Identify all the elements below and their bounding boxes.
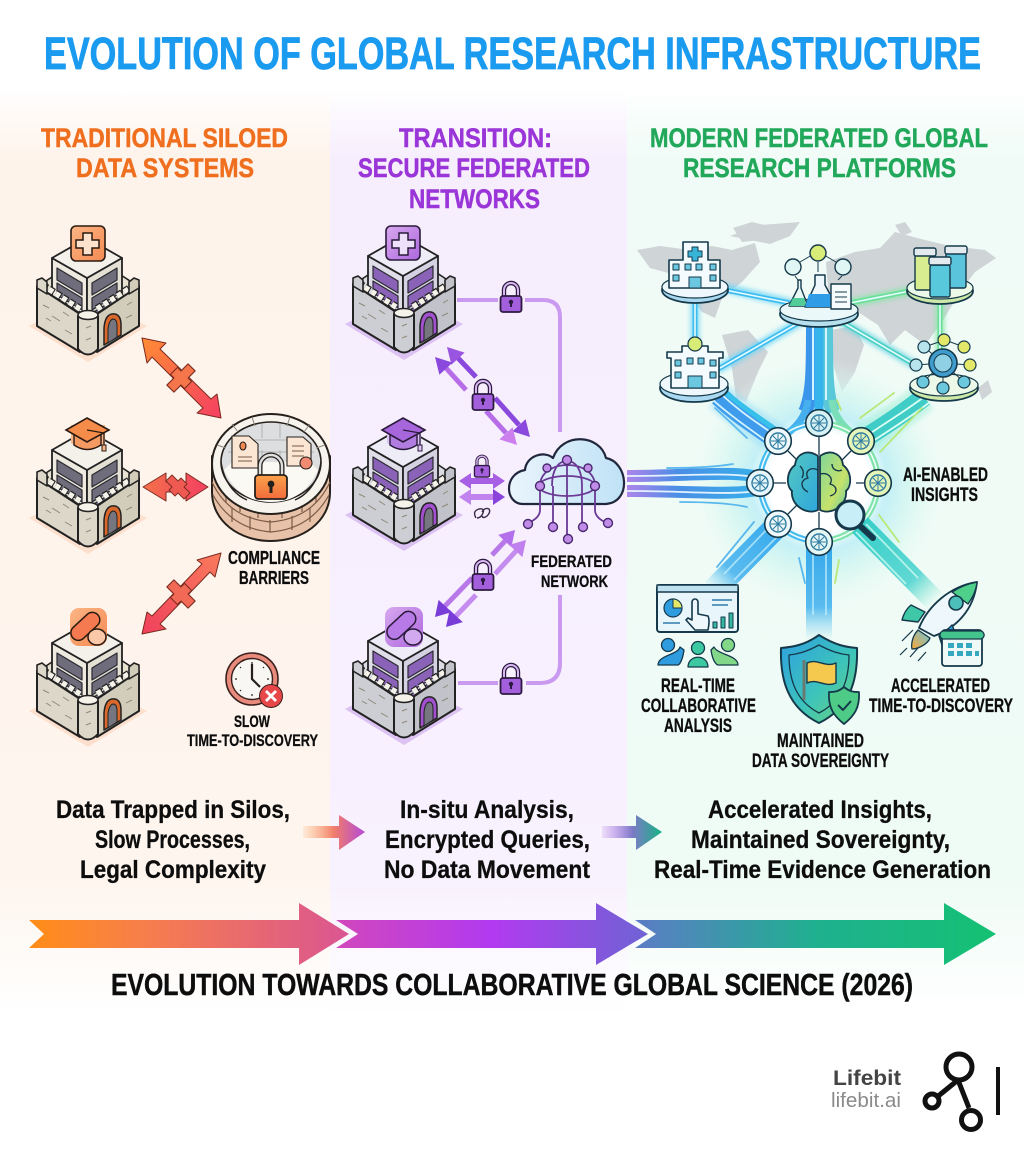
- blocked cross: [163, 360, 199, 396]
- icon: collaborative dashboard: [657, 585, 738, 667]
- icon: padlock: [255, 455, 287, 499]
- timeline arrows: [29, 903, 996, 965]
- summary: siloed systems: Slow Processes,: [95, 826, 250, 854]
- platform: biobank vials: [907, 246, 973, 304]
- world map: [637, 222, 996, 402]
- flow: hub to shield: [813, 545, 826, 640]
- panel: secure federated networks: [330, 90, 627, 1015]
- arrow: blocked pharma to compliance: [142, 553, 221, 634]
- heading: transition secure federated networks: [358, 123, 590, 214]
- federated building: pharma: [345, 607, 463, 745]
- icon: lock: [500, 665, 522, 694]
- flow: lab to hub: [782, 322, 858, 438]
- arrow: blocked hospital to compliance: [142, 338, 221, 418]
- brand wordmark: Lifebit: [833, 1067, 901, 1090]
- label: federated network: [531, 552, 612, 591]
- data flows into AI hub: [627, 322, 936, 640]
- label: compliance barriers: BARRIERS: [239, 568, 309, 588]
- ring: left half: [760, 423, 819, 541]
- label: real-time collaborative analysis: COLLABORATIVE: [641, 696, 756, 717]
- blocked cross: [163, 472, 193, 502]
- arrow: traditional stage: [29, 903, 349, 965]
- label: maintained data sovereignty: MAINTAINED: [777, 731, 864, 752]
- icon: rocket: [900, 582, 984, 666]
- arrow: federated to modern: [602, 815, 662, 850]
- icon: calendar: [940, 630, 984, 666]
- summary: modern platforms: Real-Time Evidence Generation: [654, 856, 991, 884]
- panel: traditional siloed systems: [0, 90, 330, 1015]
- label: federated network: NETWORK: [541, 572, 609, 591]
- icon: lock: [500, 283, 522, 312]
- icon: check badge: [829, 687, 859, 724]
- label: slow time-to-discovery: TIME-TO-DISCOVERY: [187, 732, 318, 750]
- encrypted arrows: hospital to cloud: [435, 347, 530, 445]
- heading: transition secure federated networks: SECURE FEDERATED: [358, 153, 590, 183]
- label: compliance barriers: COMPLIANCE: [228, 548, 320, 568]
- label: federated network: FEDERATED: [531, 552, 612, 571]
- flow: hub to rocket: [856, 524, 936, 602]
- label: real-time collaborative analysis: [641, 676, 756, 737]
- siloed building: university: [29, 418, 147, 554]
- platform: university hospital: [660, 337, 728, 402]
- brand wordmark: lifebit.ai: [831, 1090, 901, 1112]
- brand wordmark: [831, 1067, 901, 1112]
- flow: node to hub: [861, 397, 930, 445]
- summary: siloed systems: Legal Complexity: [80, 856, 266, 884]
- blocked cross: [163, 576, 199, 612]
- summary: modern platforms: Accelerated Insights,: [708, 796, 932, 824]
- icon: federated network cloud: [509, 439, 624, 544]
- heading: transition secure federated networks: NETWORKS: [409, 184, 540, 214]
- heading: traditional siloed data systems: TRADITIONAL SILOED: [41, 123, 288, 153]
- summary: federated networks: No Data Movement: [384, 856, 591, 884]
- summary: federated networks: Encrypted Queries,: [385, 826, 590, 854]
- label: slow time-to-discovery: SLOW: [234, 713, 270, 731]
- icon: right document: [287, 437, 312, 469]
- icon: lock: [472, 561, 494, 590]
- label: compliance barriers: [228, 548, 320, 588]
- encrypted arrows: pharma to cloud: [435, 530, 526, 627]
- summary: federated networks: [384, 796, 591, 884]
- icon: collaborating people: [658, 638, 738, 667]
- label: accelerated time-to-discovery: [869, 676, 1013, 717]
- siloed building: pharma: [29, 608, 147, 747]
- label: slow time-to-discovery: [187, 713, 318, 750]
- flow: federated input: [627, 474, 762, 493]
- summary: modern platforms: Maintained Sovereignty,: [691, 826, 950, 854]
- label: real-time collaborative analysis: ANALYSIS: [664, 716, 732, 737]
- heading: traditional siloed data systems: DATA SYSTEMS: [76, 153, 254, 183]
- federated building: hospital: [345, 226, 463, 360]
- icon: small lock: [474, 456, 490, 477]
- icon: pill tile: [384, 607, 423, 647]
- label: maintained data sovereignty: DATA SOVEREIGNTY: [752, 751, 889, 772]
- heading: traditional siloed data systems: [41, 123, 288, 183]
- accent strands: [667, 393, 922, 583]
- icon: lock: [472, 381, 494, 410]
- label: real-time collaborative analysis: REAL-TIME: [661, 676, 735, 697]
- icon: sovereignty shield: [781, 635, 859, 724]
- icon: graduation cap: [66, 418, 109, 451]
- heading: modern federated global research platforms: [650, 123, 988, 183]
- summary: federated networks: In-situ Analysis,: [400, 796, 574, 824]
- summary: siloed systems: [56, 796, 290, 884]
- arrow: siloed to federated: [303, 815, 365, 850]
- icon: pill tile: [68, 608, 107, 646]
- arrow: transition stage: [336, 903, 648, 965]
- icon: slow clock: [226, 653, 282, 708]
- summary: siloed systems: Data Trapped in Silos,: [56, 796, 290, 824]
- platform: research lab: [780, 245, 858, 327]
- icon: magnifying glass: [836, 501, 873, 538]
- heading: modern federated global research platforms: RESEARCH PLATFORMS: [683, 153, 956, 183]
- label: AI-enabled insights: INSIGHTS: [911, 485, 978, 506]
- platform: hospital: [662, 242, 728, 303]
- icon: molecular nodes above lab: [785, 245, 851, 280]
- AI hub ring nodes: [747, 410, 891, 555]
- arrow: modern stage: [635, 903, 996, 965]
- summary: modern platforms: [654, 796, 991, 884]
- platform: data nodes: [910, 334, 978, 401]
- icon: AI brain: [788, 453, 850, 512]
- flow: hospital to hub: [714, 392, 784, 446]
- compliance barrier walled well: [212, 414, 330, 541]
- ring: right half: [819, 423, 878, 541]
- label: AI-enabled insights: AI-ENABLED: [903, 465, 988, 486]
- arrow: blocked university to compliance: [143, 472, 208, 502]
- siloed building: hospital: [29, 226, 147, 362]
- label: maintained data sovereignty: [752, 731, 889, 772]
- icon: medical cross tile: [386, 226, 420, 260]
- secure connector: pharma to cloud: [458, 595, 560, 694]
- icon: small chain: [475, 508, 490, 518]
- icon: brand logo: [925, 1054, 998, 1130]
- icon: left document: [232, 436, 258, 468]
- data links between platforms: [695, 288, 940, 368]
- federated building: university: [345, 418, 463, 551]
- encrypted arrows: university to cloud: [459, 456, 505, 518]
- hub glow: [694, 357, 944, 607]
- flow: hub to dashboard: [712, 524, 784, 592]
- heading: transition secure federated networks: TRANSITION:: [399, 123, 552, 153]
- globe nodes and legs: [528, 461, 607, 540]
- panel: modern federated platforms: [627, 90, 1024, 1015]
- secure connector: hospital to cloud: [457, 283, 560, 432]
- label: AI-enabled insights: [903, 465, 988, 506]
- icon: medical cross tile: [71, 226, 105, 261]
- icon: graduation cap: [382, 418, 425, 451]
